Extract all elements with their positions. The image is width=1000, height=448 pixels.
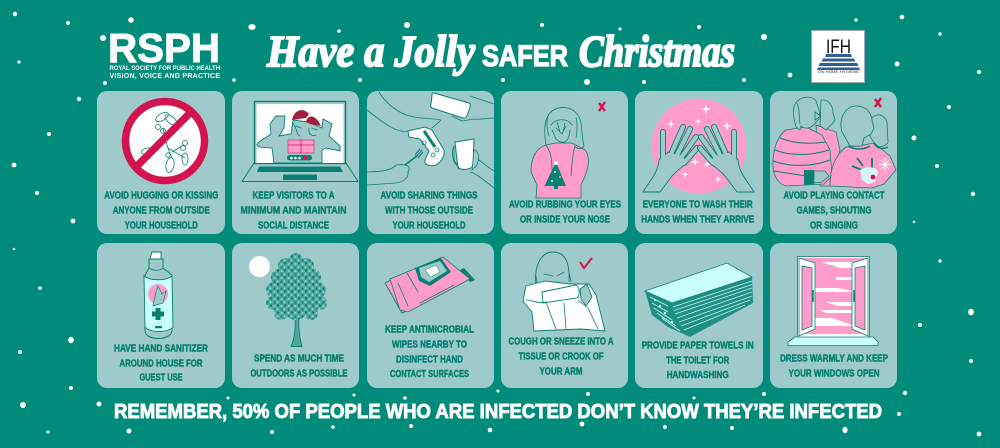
- caption: COUGH OR SNEEZE INTO A: [508, 336, 614, 348]
- caption: [104, 190, 218, 232]
- panel: avoid rubbing your eyes: [501, 91, 628, 234]
- panel: spend time outdoors: [232, 243, 359, 388]
- caption: [114, 344, 209, 384]
- caption: DISINFECT HAND: [396, 354, 463, 366]
- caption: AVOID RUBBING YOUR EYES: [509, 200, 621, 210]
- caption: YOUR ARM: [540, 366, 582, 378]
- icon: red tick: [580, 258, 592, 268]
- caption: AROUND HOUSE FOR: [120, 358, 203, 370]
- icon: sun: [249, 256, 270, 277]
- icon: sanitizer bottle: [144, 252, 173, 338]
- icon: open window: [788, 256, 878, 346]
- icon: wipes pack: [385, 257, 475, 313]
- caption: HANDWASHING: [667, 370, 729, 381]
- caption: OR SINGING: [810, 220, 858, 232]
- caption: [380, 190, 478, 232]
- caption: [641, 200, 754, 226]
- panel: keep visitors to a minimum: [232, 91, 359, 234]
- icon: red cross: [875, 98, 881, 107]
- caption: [784, 190, 884, 232]
- panel: cough or sneeze: [501, 243, 628, 388]
- icon: girl rubbing eyes: [531, 102, 605, 198]
- caption: [509, 200, 621, 226]
- caption: HAVE HAND SANITIZER: [114, 344, 209, 354]
- icon: person coughing into elbow: [523, 252, 605, 331]
- caption: [508, 336, 614, 378]
- icon: paper towels stack: [645, 263, 753, 337]
- icon: washing hands in pink circle: [643, 98, 754, 194]
- logo: RSPH: RSPH: [108, 25, 220, 71]
- caption: [642, 340, 754, 381]
- panel: dress warmly, windows open: [770, 243, 897, 388]
- caption: THE TOILET FOR: [666, 356, 730, 366]
- caption: [240, 190, 346, 232]
- title: [266, 27, 735, 76]
- caption: OUTDOORS AS POSSIBLE: [250, 368, 348, 380]
- caption: [385, 324, 474, 380]
- caption: KEEP ANTIMICROBIAL: [385, 324, 474, 336]
- caption: WITH THOSE OUTSIDE: [385, 206, 473, 216]
- caption: SOCIAL DISTANCE: [258, 220, 329, 232]
- caption: YOUR WINDOWS OPEN: [788, 368, 880, 380]
- panel: have hand sanitizer: [97, 243, 225, 388]
- panel: avoid playing contact games: [770, 91, 897, 234]
- caption: OR INSIDE YOUR NOSE: [520, 214, 610, 226]
- logo: RSPH: ROYAL SOCIETY FOR PUBLIC HEALTH: [110, 65, 220, 72]
- icon: red cross: [599, 102, 605, 111]
- panel: keep antimicrobial wipes: [367, 243, 494, 388]
- icon: no mistletoe sign: [126, 102, 204, 180]
- panel: provide paper towels: [635, 243, 763, 388]
- panel: avoid sharing things: [367, 91, 494, 234]
- logo: RSPH: VISION, VOICE AND PRACTICE: [110, 73, 220, 80]
- caption: GUEST USE: [140, 372, 183, 384]
- panel: avoid hugging or kissing: [97, 91, 225, 234]
- title: Have a Jolly: [266, 27, 475, 76]
- caption: GAMES, SHOUTING: [796, 206, 872, 216]
- caption: DRESS WARMLY AND KEEP: [780, 354, 888, 364]
- icon: hands sharing phone, controller, fork and glass: [367, 92, 494, 188]
- caption: YOUR HOUSEHOLD: [392, 220, 466, 232]
- logo: IFH: IFH: [826, 37, 851, 58]
- title: SAFER: [482, 40, 568, 73]
- caption: TISSUE OR CROOK OF: [518, 352, 604, 362]
- caption: [250, 354, 348, 380]
- icon: people singing in Christmas jumpers: [773, 97, 896, 188]
- panel: everyone to wash their hands: [635, 91, 763, 234]
- logo: IFH: [812, 30, 864, 82]
- caption: MINIMUM AND MAINTAIN: [240, 206, 346, 216]
- caption: [780, 354, 888, 380]
- caption: WIPES NEARBY TO: [392, 340, 467, 350]
- caption: HANDS WHEN THEY ARRIVE: [641, 214, 754, 226]
- footer message: REMEMBER, 50% OF PEOPLE WHO ARE INFECTED DON’T KNOW THEY’RE INFECTED: [114, 401, 882, 423]
- caption: PROVIDE PAPER TOWELS IN: [642, 340, 754, 352]
- logo: IFH: ON HOME HYGIENE: [818, 70, 860, 74]
- caption: SPEND AS MUCH TIME: [254, 354, 344, 364]
- caption: EVERYONE TO WASH THEIR: [643, 200, 753, 210]
- title: Christmas: [579, 27, 735, 76]
- icon: laptop video call: [242, 102, 358, 182]
- caption: CONTACT SURFACES: [390, 369, 469, 380]
- caption: AVOID PLAYING CONTACT: [784, 190, 884, 202]
- caption: ANYONE FROM OUTSIDE: [113, 206, 210, 216]
- caption: AVOID HUGGING OR KISSING: [104, 190, 218, 202]
- caption: KEEP VISITORS TO A: [252, 190, 334, 202]
- caption: YOUR HOUSEHOLD: [125, 220, 198, 232]
- icon: tree: [266, 253, 327, 346]
- caption: AVOID SHARING THINGS: [380, 190, 478, 202]
